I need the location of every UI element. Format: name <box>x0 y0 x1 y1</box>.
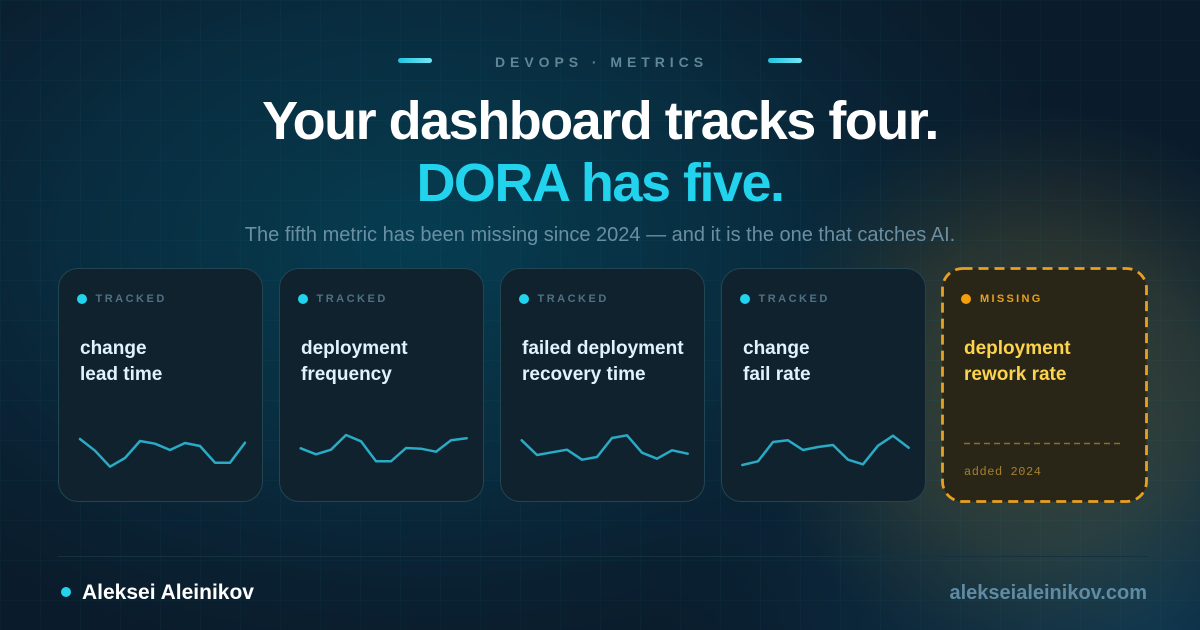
card: deployment rework rate (missing) <box>941 267 1148 503</box>
website: alekseialeinikov.com <box>949 582 1147 604</box>
card: change fail rate: change <box>743 338 810 359</box>
card: change lead time: change <box>80 338 147 359</box>
footer divider <box>58 556 1148 557</box>
card: change fail rate <box>720 268 926 502</box>
card: deployment rework rate (missing): deployment <box>964 338 1071 358</box>
card: deployment frequency: frequency <box>301 364 392 385</box>
title: DORA has five. <box>416 153 784 213</box>
card: failed deployment recovery time: recovery time <box>522 364 646 385</box>
card: deployment rework rate (missing): rework rate <box>964 364 1066 384</box>
card: deployment rework rate (missing): MISSING <box>980 292 1043 304</box>
card: change fail rate: fail rate <box>743 364 811 385</box>
author: Aleksei Aleinikov <box>82 581 254 604</box>
eyebrow: DEVOPS · METRICS <box>495 54 708 70</box>
card: change lead time: TRACKED <box>96 293 167 305</box>
title: Your dashboard tracks four. <box>262 91 938 151</box>
title <box>262 91 938 213</box>
card: deployment frequency: TRACKED <box>316 293 388 305</box>
card: change lead time <box>58 268 263 502</box>
card: change lead time: lead time <box>80 364 162 385</box>
card: deployment frequency: deployment <box>301 338 408 359</box>
card: deployment frequency <box>278 268 484 502</box>
subtitle: The fifth metric has been missing since 2024 — and it is the one that catches AI. <box>245 224 955 246</box>
card: deployment rework rate (missing): added 2024 <box>964 465 1042 479</box>
card: failed deployment recovery time <box>500 268 705 502</box>
card: failed deployment recovery time: TRACKED <box>538 293 609 305</box>
card: change fail rate: TRACKED <box>758 293 830 305</box>
eyebrow <box>398 54 802 70</box>
card: failed deployment recovery time: failed deployment <box>522 338 684 359</box>
